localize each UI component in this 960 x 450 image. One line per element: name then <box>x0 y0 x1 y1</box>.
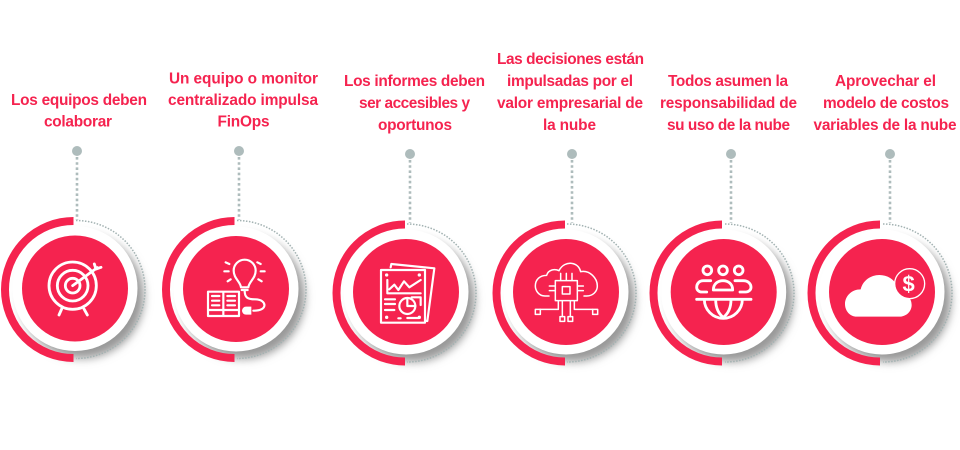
panel: un equipo o monitor centralizado <box>166 70 318 359</box>
heading: principle 6: variables de la nube <box>814 117 957 134</box>
ring and disc 5 <box>654 224 794 362</box>
connector: dot and dotted line 5 <box>726 149 736 223</box>
heading: principle 5: responsabilidad de <box>660 95 797 112</box>
ring and disc 6 <box>812 224 952 362</box>
heading: principle 2: centralizado impulsa <box>168 92 318 109</box>
heading: principle 3: ser accesibles y <box>359 95 470 112</box>
icon: target with arrow <box>49 262 101 315</box>
ring and disc 3 <box>336 224 476 362</box>
heading: principle 4: la nube <box>543 117 596 134</box>
heading: principle 4: impulsadas por el <box>507 73 633 90</box>
heading: principle 4: Las decisiones están <box>497 51 644 68</box>
ring and disc 4 <box>496 224 636 362</box>
heading: principle 3: oportunos <box>378 117 452 134</box>
heading: principle 2: FinOps <box>218 114 270 130</box>
icon: cloud with dollar badge <box>845 269 925 317</box>
heading: principle 3: Los informes deben <box>344 73 485 90</box>
connector: dot and dotted line 6 <box>885 149 895 223</box>
connector: dot and dotted line 1 <box>72 146 82 220</box>
heading: principle 5: Todos asumen la <box>668 73 788 90</box>
panel: todos asumen la responsabilidad <box>654 73 797 362</box>
heading: principle 5: su uso de la nube <box>667 117 790 134</box>
heading: principle 6: Aprovechar el <box>835 73 936 90</box>
panel: las decisiones impulsadas por valor <box>496 51 644 362</box>
heading: principle 2: Un equipo o monitor <box>169 70 318 88</box>
connector: dot and dotted line 2 <box>234 146 244 220</box>
heading: principle 2 <box>168 70 318 130</box>
ring and disc 1 <box>5 220 145 358</box>
panel: aprovechar el modelo de costos <box>812 73 957 362</box>
heading: principle 1 <box>11 92 147 130</box>
panel: los informes deben ser accesibles <box>336 73 485 362</box>
connector: dot and dotted line 3 <box>405 149 415 223</box>
heading: principle 5 <box>660 73 797 134</box>
ring and disc 2 <box>166 220 306 359</box>
heading: principle 6 <box>814 73 957 134</box>
icon: people around a globe <box>697 266 751 318</box>
icon: cloud with microchip <box>535 263 598 321</box>
heading: principle 6: modelo de costos <box>823 95 949 112</box>
heading: principle 4 <box>497 51 644 134</box>
icon: light bulb, book and plug <box>208 260 265 316</box>
heading: principle 4: valor empresarial de <box>497 95 643 112</box>
icon: cloud with dollar badge: $ <box>903 271 915 296</box>
panel: los equipos deben colaborar <box>5 92 147 358</box>
connector: dot and dotted line 4 <box>567 149 577 223</box>
icon: report papers with charts <box>381 264 434 323</box>
heading: principle 1: Los equipos deben <box>11 92 147 109</box>
heading: principle 3 <box>344 73 485 134</box>
heading: principle 1: colaborar <box>44 114 112 130</box>
